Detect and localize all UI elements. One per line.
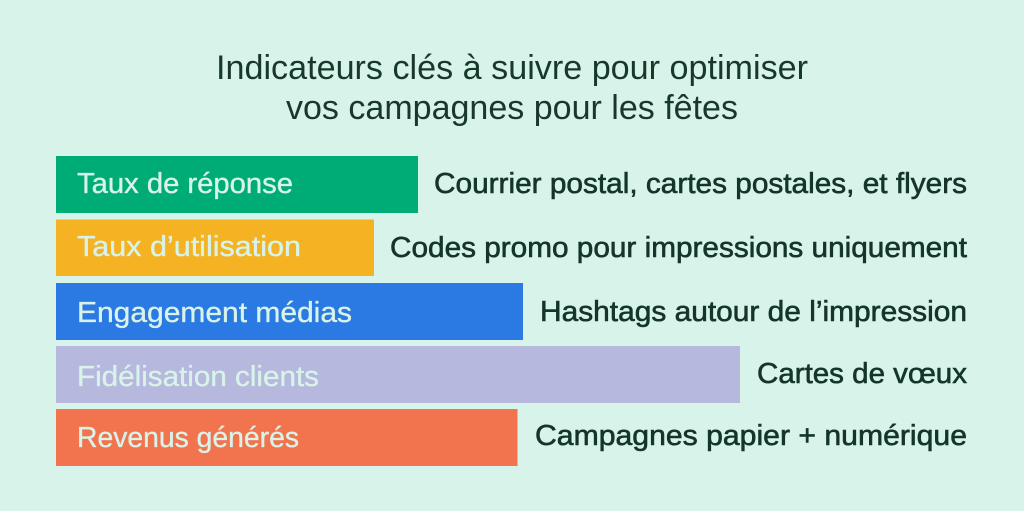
row: Engagement médias	[56, 283, 967, 340]
title: vos campagnes pour les fêtes	[286, 89, 738, 127]
row: Revenus générés: Revenus générés	[77, 422, 299, 454]
row: Revenus générés	[56, 409, 967, 466]
row: Taux de réponse: Courrier postal, cartes postales, et flyers	[434, 168, 967, 200]
row: Taux d'utilisation: Taux d’utilisation	[77, 231, 301, 263]
row: Taux d'utilisation	[56, 220, 967, 276]
row: Taux d'utilisation: Codes promo pour impressions uniquement	[390, 232, 967, 264]
row: Taux de réponse: Taux de réponse	[77, 168, 293, 200]
row: Taux de réponse	[56, 156, 967, 213]
row: Revenus générés: Campagnes papier + numérique	[535, 420, 967, 452]
row: Fidélisation clients: Fidélisation clients	[77, 361, 319, 393]
row: Fidélisation clients	[56, 346, 967, 403]
title	[216, 49, 808, 127]
row: Engagement médias: Engagement médias	[77, 297, 352, 329]
title: Indicateurs clés à suivre pour optimiser	[216, 49, 808, 87]
row: Engagement médias: Hashtags autour de l’impression	[540, 296, 967, 328]
row: Fidélisation clients: Cartes de vœux	[757, 358, 967, 390]
